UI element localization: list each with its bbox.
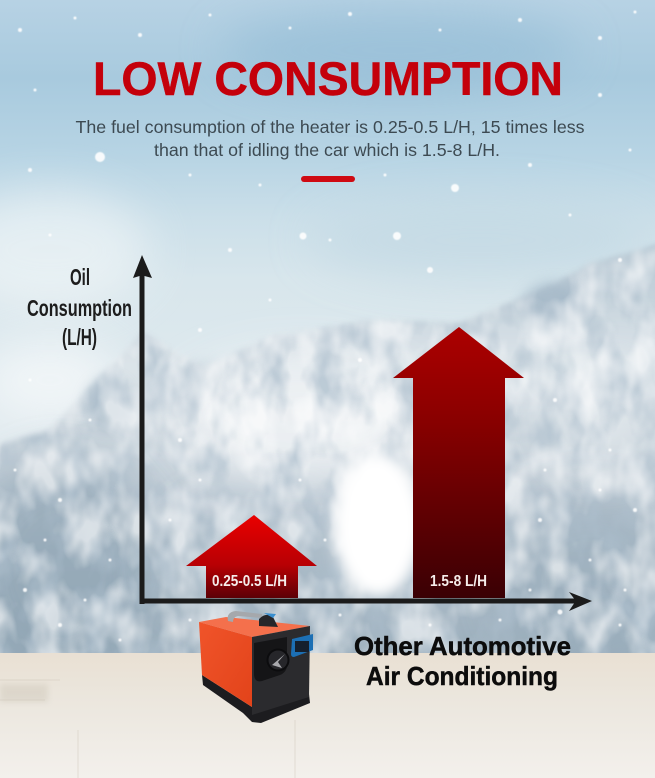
subtitle text: The fuel consumption of the heater is 0.25-0.5 L/H, 15 times less	[76, 117, 585, 137]
fan	[268, 650, 288, 670]
heater top	[199, 617, 310, 637]
label: heater consumption: 0.25-0.5 L/H	[212, 573, 287, 590]
arrow: small consumption bar	[186, 515, 317, 598]
ground: snowy wooden surface	[0, 653, 655, 778]
title: LOW CONSUMPTION	[93, 52, 563, 105]
x axis arrow	[140, 592, 592, 611]
control display	[291, 634, 313, 657]
y axis label: Oil	[70, 264, 90, 290]
icon: diesel heater product	[199, 611, 313, 723]
x axis labels: Other Automotive	[354, 631, 571, 661]
subtitle text: than that of idling the car which is 1.5-8 L/H.	[154, 140, 500, 160]
title divider	[301, 176, 355, 182]
y axis arrow	[133, 255, 152, 604]
y axis label	[27, 264, 132, 350]
handle	[228, 611, 262, 622]
fan recess	[254, 637, 287, 681]
y axis label: Consumption	[27, 295, 132, 321]
heater front panel	[252, 626, 310, 715]
y axis label: (L/H)	[62, 324, 97, 350]
snowflakes	[14, 10, 637, 642]
x axis labels: Air Conditioning	[366, 661, 558, 691]
label: car consumption: 1.5-8 L/H	[430, 573, 487, 590]
x axis labels	[354, 631, 571, 691]
arrow: large consumption bar	[393, 327, 524, 598]
subtitle text	[76, 117, 585, 160]
heater orange side	[199, 622, 252, 707]
heater feet and base	[202, 675, 310, 723]
